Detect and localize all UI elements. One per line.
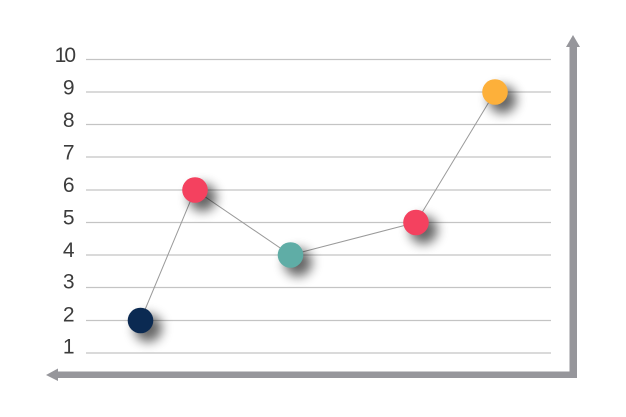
y-axis labels: 10 [55,44,75,67]
y-axis labels [55,44,75,358]
axis arrows [46,35,580,381]
y-axis labels: 5 [63,206,74,230]
y-axis labels: 8 [63,109,74,132]
connecting line [140,92,495,320]
y-axis labels: 2 [63,304,74,326]
y-axis labels: 3 [63,270,74,294]
data point 6 red [182,177,216,212]
data point 4 teal [278,242,312,276]
y-axis labels: 6 [63,174,74,197]
y-axis labels: 7 [63,142,74,164]
y-axis labels: 1 [63,336,74,358]
data point 5 red [403,210,438,244]
y-axis labels: 9 [63,76,74,100]
y-axis labels: 4 [63,239,75,262]
data point 2 navy [128,308,162,342]
data point 9 yellow [482,79,516,114]
